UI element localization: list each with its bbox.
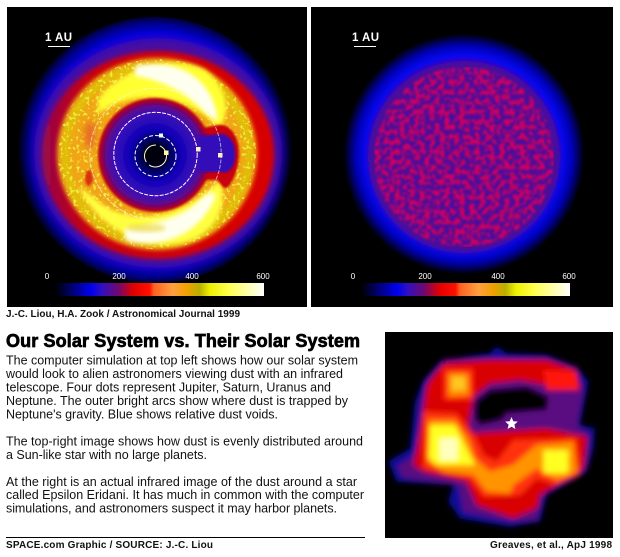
colour scale bar: 200: [112, 272, 126, 281]
planets: [159, 134, 222, 158]
text block: explanation: At the right is an actual infrared image of the dust around a star: [6, 475, 357, 489]
colour scale bar: [351, 272, 576, 296]
text block: explanation: simulations, and astronomers suspect it may harbor planets.: [6, 502, 337, 516]
scale label: 1 AU: 1 AU: [45, 32, 72, 44]
colour scale bar: 200: [418, 272, 432, 281]
colour scale bar: 400: [491, 272, 505, 281]
icon: star: [505, 417, 518, 429]
panel: simulated solar system dust disk: [7, 7, 307, 307]
title: Our Solar System vs. Their Solar System: [6, 331, 360, 351]
credit: source: SPACE.com Graphic / SOURCE: J.-C. Liou: [6, 540, 213, 551]
footer rule: [6, 537, 365, 538]
orbits: [90, 88, 221, 220]
text block: explanation: Neptune. The outer bright arcs show where dust is trapped by: [6, 394, 349, 408]
scale label: 1 AU: 1 AU: [352, 32, 379, 44]
colour scale bar: 0: [351, 272, 356, 281]
colour scale bar: [45, 272, 270, 296]
text block: explanation: [5, 354, 364, 516]
credit: left simulation: J.-C. Liou, H.A. Zook / Astronomical Journal 1999: [6, 309, 240, 320]
text block: explanation: would look to alien astronomers viewing dust with an infrared: [5, 367, 343, 381]
colour scale bar: 0: [45, 272, 50, 281]
colour scale bar: 400: [185, 272, 199, 281]
text block: explanation: a Sun-like star with no large planets.: [6, 448, 207, 462]
panel: evenly distributed dust disk: [311, 7, 613, 307]
text block: explanation: The top-right image shows how dust is evenly distributed around: [6, 434, 363, 448]
text block: explanation: telescope. Four dots represent Jupiter, Saturn, Uranus and: [6, 380, 331, 394]
text block: explanation: Neptune's gravity. Blue shows relative dust voids.: [6, 407, 278, 421]
colour scale bar: 600: [256, 272, 270, 281]
text block: explanation: The computer simulation at top left shows how our solar system: [6, 354, 358, 368]
text block: explanation: called Epsilon Eridani. It has much in common with the computer: [6, 488, 364, 502]
colour scale bar: 600: [562, 272, 576, 281]
panel: Epsilon Eridani infrared image: [385, 332, 613, 538]
credit: Epsilon Eridani image: Greaves, et al., ApJ 1998: [490, 540, 612, 551]
